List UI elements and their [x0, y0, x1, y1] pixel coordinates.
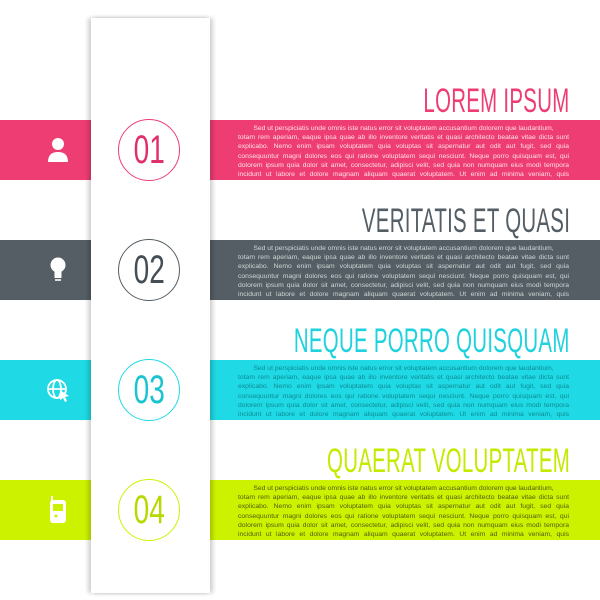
text block 3: [238, 365, 569, 418]
text block 1: dolorem ipsum quia dolor sit amet, consectetur, adipisci velit, sed quia non numquam eius modi tempora: [238, 162, 569, 169]
circle 03: 03: [133, 368, 165, 412]
icon: user: [48, 138, 68, 162]
title 4: QUAERAT VOLUPTATEM: [327, 442, 570, 480]
text block 3: explicabo. Nemo enim ipsam voluptatem quia voluptas sit aspernatur aut odit aut fugit, sed quia: [238, 383, 569, 390]
text block 3: consequuntur magni dolores eos qui ratione voluptatem sequi nesciunt. Neque porro quisquam est, qui: [238, 393, 569, 400]
text block 2: totam rem aperiam, eaque ipsa quae ab illo inventore veritatis et quasi architecto beatae vitae dicta sunt: [238, 254, 569, 261]
text block 1: explicabo. Nemo enim ipsam voluptatem quia voluptas sit aspernatur aut odit aut fugit, sed quia: [238, 143, 569, 150]
vertical paper strip: [91, 18, 210, 593]
band: pink: [0, 120, 600, 180]
text block 3: incidunt ut labore et dolore magnam aliquam quaerat voluptatem. Ut enim ad minima veniam, quis: [238, 411, 569, 418]
text block 3: Sed ut perspiciatis unde omnis iste natus error sit voluptatem accusantium dolorem que laudantium,: [253, 365, 554, 372]
circle 02: 02: [133, 248, 165, 292]
circle 03: [118, 359, 180, 421]
text block 2: dolorem ipsum quia dolor sit amet, consectetur, adipisci velit, sed quia non numquam eius modi tempora: [238, 282, 569, 289]
text block 4: Sed ut perspiciatis unde omnis iste natus error sit voluptatem accusantium dolorem que laudantium,: [253, 485, 554, 492]
circle 04: [118, 479, 180, 541]
title 3: NEQUE PORRO QUISQUAM: [294, 322, 570, 360]
text block 4: incidunt ut labore et dolore magnam aliquam quaerat voluptatem. Ut enim ad minima veniam, quis: [238, 531, 569, 538]
band: cyan: [0, 360, 600, 420]
title 1: LOREM IPSUM: [424, 82, 570, 120]
text block 4: dolorem ipsum quia dolor sit amet, consectetur, adipisci velit, sed quia non numquam eius modi tempora: [238, 522, 569, 529]
text block 1: consequuntur magni dolores eos qui ratione voluptatem sequi nesciunt. Neque porro quisquam est, qui: [238, 153, 569, 160]
band: lime: [0, 480, 600, 540]
text block 3: totam rem aperiam, eaque ipsa quae ab illo inventore veritatis et quasi architecto beatae vitae dicta sunt: [238, 374, 569, 381]
icon: phone: [50, 496, 66, 523]
band: gray: [0, 240, 600, 300]
circle 01: 01: [133, 128, 165, 172]
circle 01: [118, 119, 180, 181]
text block 4: [238, 485, 569, 538]
text block 2: explicabo. Nemo enim ipsam voluptatem quia voluptas sit aspernatur aut odit aut fugit, sed quia: [238, 263, 569, 270]
text block 2: [238, 245, 569, 298]
text block 3: dolorem ipsum quia dolor sit amet, consectetur, adipisci velit, sed quia non numquam eius modi tempora: [238, 402, 569, 409]
text block 1: Sed ut perspiciatis unde omnis iste natus error sit voluptatem accusantium dolorem que laudantium,: [253, 125, 554, 132]
circle 02: [118, 239, 180, 301]
text block 1: totam rem aperiam, eaque ipsa quae ab illo inventore veritatis et quasi architecto beatae vitae dicta sunt: [238, 134, 569, 141]
text block 1: [238, 125, 570, 178]
text block 4: totam rem aperiam, eaque ipsa quae ab illo inventore veritatis et quasi architecto beatae vitae dicta sunt: [238, 494, 569, 501]
title 2: VERITATIS ET QUASI: [362, 202, 570, 240]
icon: bulb: [50, 258, 66, 281]
text block 2: incidunt ut labore et dolore magnam aliquam quaerat voluptatem. Ut enim ad minima veniam, quis: [238, 291, 569, 298]
text block 4: consequuntur magni dolores eos qui ratione voluptatem sequi nesciunt. Neque porro quisquam est, qui: [238, 513, 569, 520]
text block 4: explicabo. Nemo enim ipsam voluptatem quia voluptas sit aspernatur aut odit aut fugit, sed quia: [238, 503, 569, 510]
text block 2: Sed ut perspiciatis unde omnis iste natus error sit voluptatem accusantium dolorem que laudantium,: [253, 245, 554, 252]
circle 04: 04: [133, 488, 165, 532]
text block 2: consequuntur magni dolores eos qui ratione voluptatem sequi nesciunt. Neque porro quisquam est, qui: [238, 273, 569, 280]
text block 1: incidunt ut labore et dolore magnam aliquam quaerat voluptatem. Ut enim ad minima veniam, quis: [238, 171, 569, 178]
icon: globe cursor: [47, 379, 69, 402]
